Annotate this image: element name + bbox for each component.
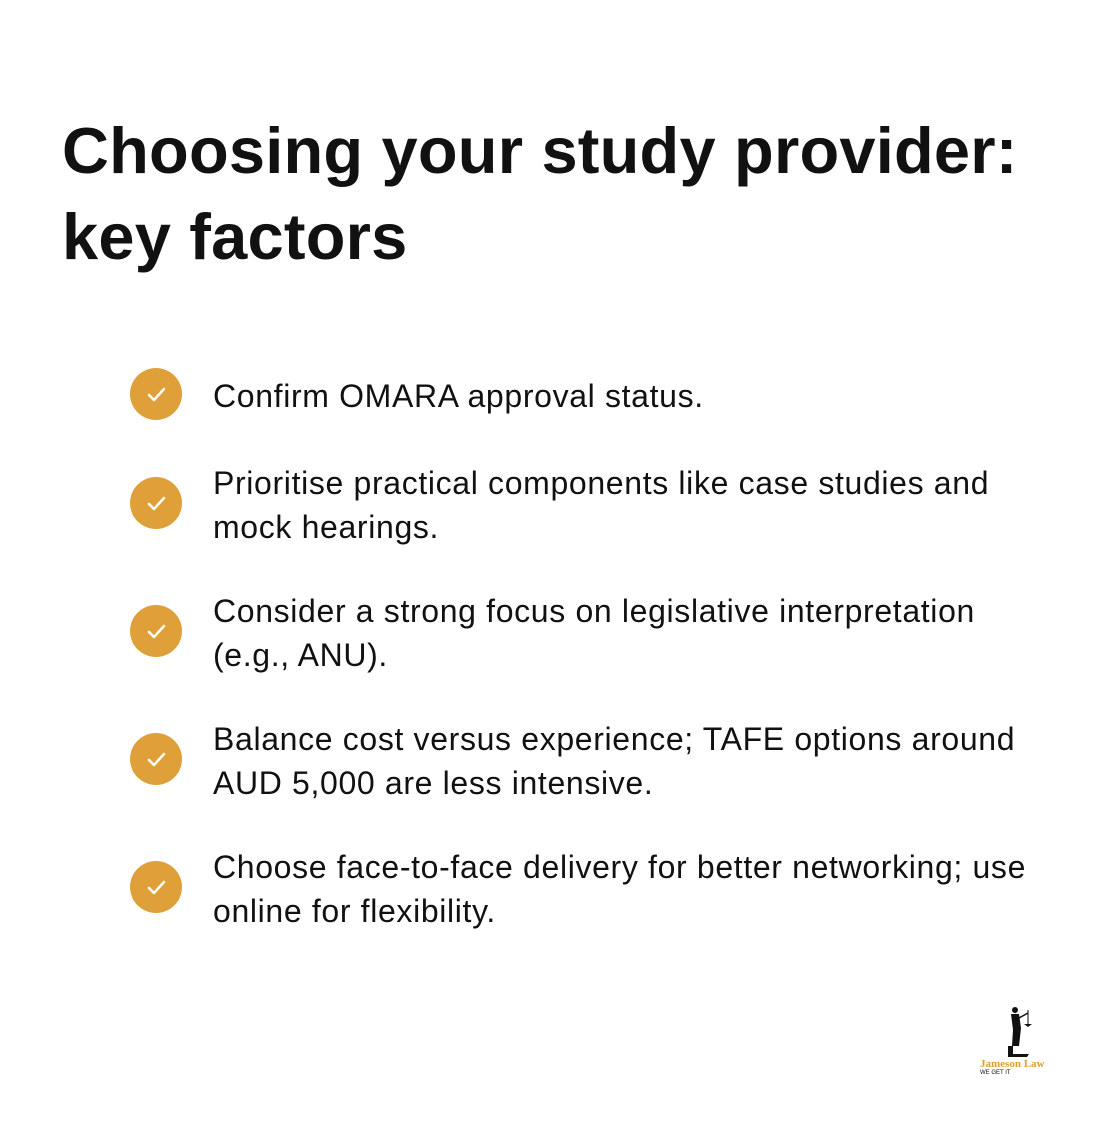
text: online for flexibility. (213, 893, 496, 929)
text: Prioritise practical components like case studies and (213, 465, 989, 501)
title (62, 114, 1018, 273)
text: Confirm OMARA approval status. (213, 378, 704, 414)
text: Balance cost versus experience; TAFE options around (213, 721, 1015, 757)
item 1 (130, 368, 704, 420)
text: AUD 5,000 are less intensive. (213, 765, 653, 801)
logo: WE GET IT (980, 1070, 1011, 1076)
icon: check (130, 861, 182, 913)
icon: check (130, 368, 182, 420)
icon: check (130, 477, 182, 529)
icon: check (130, 605, 182, 657)
item 5 (130, 849, 1026, 929)
text (213, 721, 1015, 801)
logo (980, 1007, 1044, 1076)
text: Choose face-to-face delivery for better networking; use (213, 849, 1026, 885)
text (213, 593, 975, 673)
text: Consider a strong focus on legislative interpretation (213, 593, 975, 629)
icon: justice figure (1008, 1007, 1032, 1057)
item 2 (130, 465, 989, 545)
text (213, 465, 989, 545)
title: Choosing your study provider: (62, 114, 1018, 187)
text: brand: Jameson Law (980, 1058, 1044, 1070)
item 3 (130, 593, 975, 673)
title: key factors (62, 200, 407, 273)
icon: check (130, 733, 182, 785)
text: (e.g., ANU). (213, 637, 388, 673)
item 4 (130, 721, 1015, 801)
text: mock hearings. (213, 509, 439, 545)
text (213, 849, 1026, 929)
